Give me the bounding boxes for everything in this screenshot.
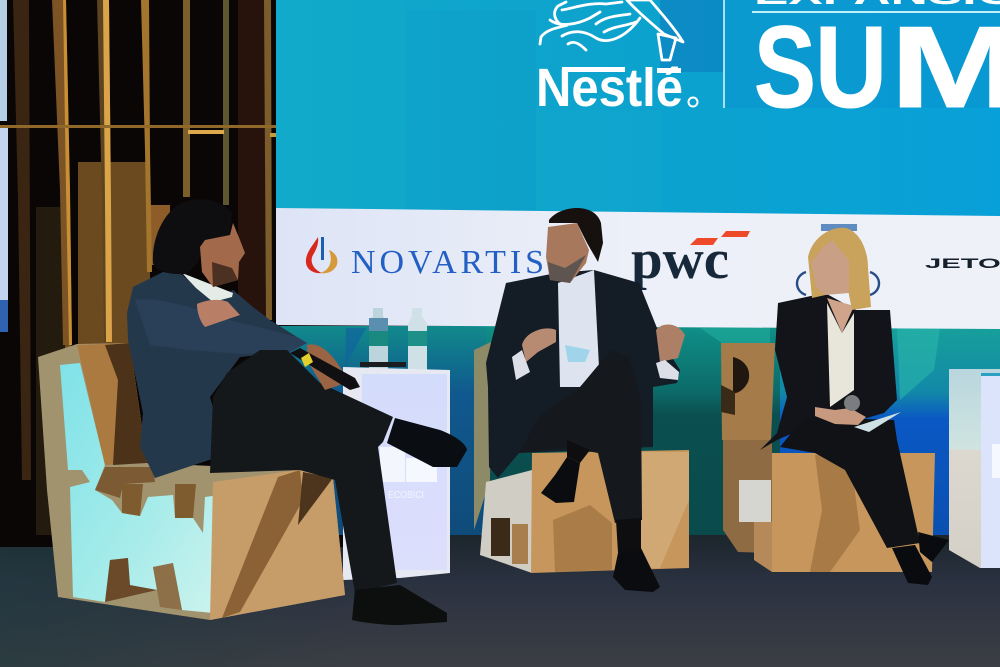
water bottles: [360, 308, 427, 370]
shoes: [541, 457, 580, 503]
shirt: [558, 270, 599, 387]
wooden slat wall: [0, 0, 285, 547]
hand on arm: [197, 300, 240, 327]
summit heading: U: [815, 2, 887, 132]
sponsor band: pwc: [631, 229, 729, 291]
Nestlé logo: [536, 0, 698, 118]
trousers: [519, 350, 642, 523]
sponsor band: NOVARTIS: [351, 244, 544, 281]
blouse: [827, 303, 854, 407]
trousers: [210, 350, 397, 593]
jacket: [127, 272, 307, 478]
face: [546, 223, 589, 283]
Nestlé logo: Nestlé: [536, 58, 683, 118]
glowing side table: [343, 367, 450, 580]
microphone: [844, 395, 860, 411]
face: [200, 223, 245, 287]
sponsor band: JETOUR: [925, 255, 1000, 271]
person centre: [486, 208, 685, 592]
boots: [892, 545, 932, 585]
hand on knee: [307, 344, 343, 390]
chest skin: [827, 298, 854, 333]
hands: [522, 328, 556, 362]
lit wall behind the panel: [276, 326, 1000, 548]
summit heading: S: [754, 3, 816, 132]
cardboard chair left: [38, 343, 345, 620]
jacket: [760, 293, 897, 450]
cuffs: [512, 350, 679, 380]
hair: [549, 208, 603, 262]
cardboard chair right: [721, 343, 935, 572]
trousers: [780, 417, 920, 548]
shirt: [182, 273, 233, 302]
cardboard chair centre: [474, 342, 689, 573]
sleeve: [135, 299, 307, 354]
sponsor band: [276, 208, 1000, 329]
socks: [567, 440, 641, 553]
glowing table right: [949, 369, 1000, 568]
jacket: [486, 270, 680, 478]
hair: [153, 199, 232, 274]
notes: [854, 412, 901, 432]
microphone: [290, 348, 360, 390]
hair: [808, 228, 871, 310]
glowing side table: ECOBICI: [388, 490, 424, 501]
arms and hands: [815, 407, 866, 425]
person left: [127, 199, 467, 625]
stage screen: [276, 0, 1000, 216]
face: [811, 240, 849, 295]
summit heading: [754, 0, 1000, 132]
person right: [760, 228, 949, 585]
shoes: [387, 418, 467, 467]
floor: [0, 535, 1000, 667]
